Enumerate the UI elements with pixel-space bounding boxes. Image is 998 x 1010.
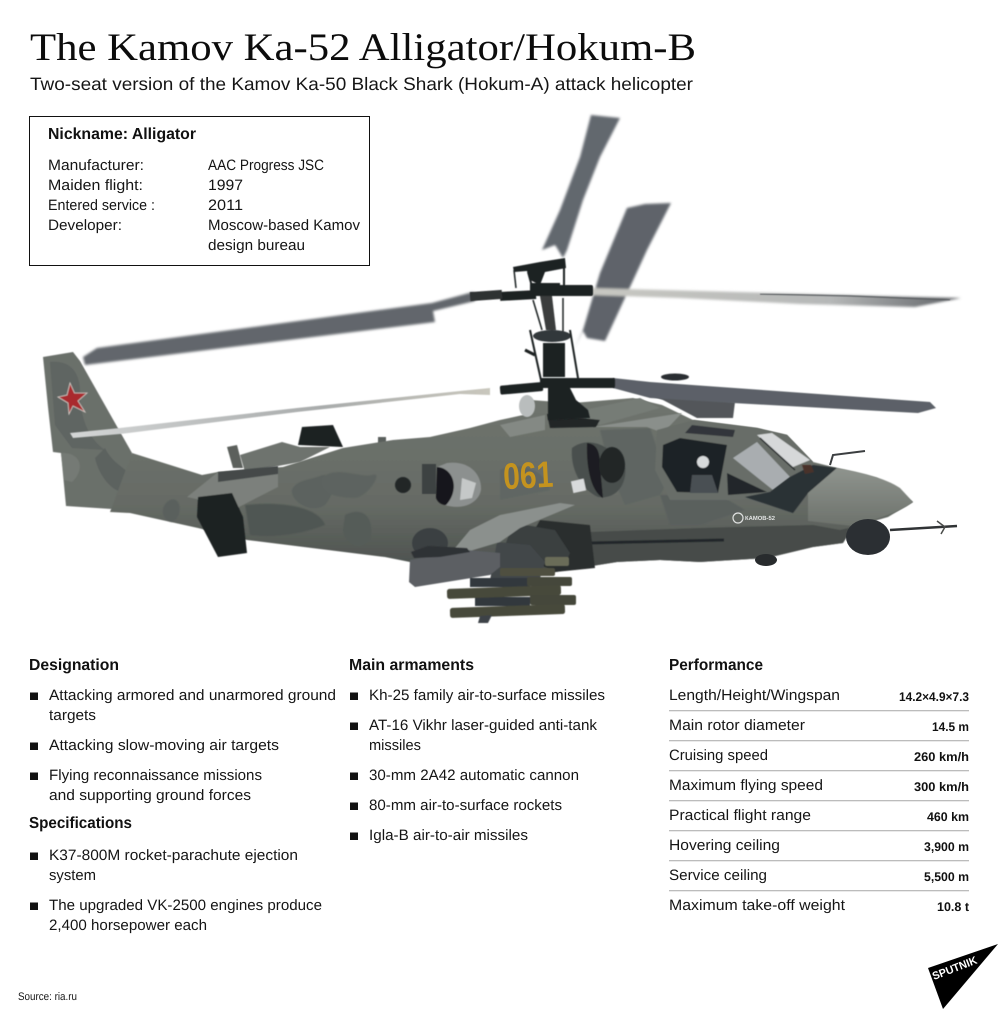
entered service row: 2011 xyxy=(208,197,243,214)
panel: performance table: Length/Height/Wingspan xyxy=(669,687,840,704)
heading: designation: Designation xyxy=(29,657,119,674)
panel: main armaments: 30-mm 2A42 automatic cannon xyxy=(369,767,579,784)
entered service row xyxy=(48,197,243,214)
panel: specifications: The upgraded VK-2500 engines produce xyxy=(49,897,322,914)
lower dark panel xyxy=(520,520,595,572)
rotor hub and mast xyxy=(470,258,615,420)
panel: performance table xyxy=(669,657,970,914)
nose xyxy=(745,465,913,526)
armament pylon and missiles xyxy=(409,503,576,623)
panel: specifications xyxy=(29,815,322,934)
pilot xyxy=(690,456,718,493)
belly shadow xyxy=(540,525,853,575)
serial number 061: 061 xyxy=(502,454,554,497)
panel: performance table: 10.8 t xyxy=(937,900,970,914)
panel: performance table: Maximum flying speed xyxy=(669,777,823,794)
panel: performance table: 3,900 m xyxy=(924,840,969,854)
tail fin xyxy=(43,352,140,510)
developer row: Moscow-based Kamov xyxy=(208,217,360,234)
rotor blades behind the body xyxy=(83,115,961,365)
Kamov logo: КАМОВ-52 xyxy=(745,515,776,522)
nose pitot xyxy=(830,451,865,465)
panel: specifications: 2,400 horsepower each xyxy=(49,917,207,934)
cockpit canopy xyxy=(655,420,813,500)
panel: performance table: Main rotor diameter xyxy=(669,717,805,734)
panel: designation: and supporting ground forces xyxy=(49,787,251,804)
panel: performance table: Practical flight range xyxy=(669,807,811,824)
heading: main armaments: Main armaments xyxy=(349,657,474,674)
title: The Kamov Ka-52 Alligator/Hokum-B xyxy=(30,26,696,69)
panel: main armaments: 80-mm air-to-surface rockets xyxy=(369,797,562,814)
heading: performance: Performance xyxy=(669,657,763,674)
panel: performance table: 14.2×4.9×7.3 xyxy=(899,690,969,704)
maiden flight row: Maiden flight: xyxy=(48,177,143,194)
subtitle: Two-seat version of the Kamov Ka-50 Black Shark (Hokum-A) attack helicopter xyxy=(30,74,693,94)
blade dark edge xyxy=(760,294,950,300)
panel: designation: Attacking slow-moving air targets xyxy=(49,737,279,754)
panel: performance table: 460 km xyxy=(927,810,969,824)
maiden flight row: 1997 xyxy=(208,177,243,194)
panel: specifications: system xyxy=(49,867,96,884)
panel: main armaments xyxy=(349,657,605,844)
heading: specifications: Specifications xyxy=(29,815,132,832)
nickname: Nickname: Alligator xyxy=(48,126,196,143)
panel: performance table: 5,500 m xyxy=(924,870,969,884)
rear upper fuselage details xyxy=(227,425,386,472)
panel: performance table: Service ceiling xyxy=(669,867,767,884)
panel: specifications: K37-800M rocket-parachute ejection xyxy=(49,847,298,864)
red star xyxy=(58,383,87,414)
stabilizer xyxy=(187,466,278,557)
main fuselage xyxy=(110,398,913,575)
maiden flight row xyxy=(48,177,243,194)
panel: main armaments: AT-16 Vikhr laser-guided anti-tank xyxy=(369,717,597,734)
sensor turret and probe xyxy=(755,519,957,566)
panel: main armaments: missiles xyxy=(369,737,421,754)
top fairing panels xyxy=(500,374,735,437)
logo: Sputnik xyxy=(928,944,998,1009)
camouflage patches xyxy=(163,428,745,546)
panel: designation xyxy=(29,657,336,804)
manufacturer row xyxy=(48,157,324,174)
panel: designation: targets xyxy=(49,707,96,724)
developer row: design bureau xyxy=(208,237,305,254)
helicopter illustration xyxy=(43,115,961,623)
entered service row: Entered service : xyxy=(48,197,155,214)
info box xyxy=(30,116,370,266)
engine nacelles xyxy=(395,442,625,507)
developer row xyxy=(48,217,360,254)
panel: designation: Attacking armored and unarmored ground xyxy=(49,687,336,704)
panel: performance table: Hovering ceiling xyxy=(669,837,780,854)
logo: Sputnik: SPUTNIK xyxy=(931,955,979,983)
developer row: Developer: xyxy=(48,217,122,234)
panel: main armaments: Igla-B air-to-air missiles xyxy=(369,827,528,844)
panel: performance table: 14.5 m xyxy=(932,720,969,734)
manufacturer row: Manufacturer: xyxy=(48,157,144,174)
panel: designation: Flying reconnaissance missions xyxy=(49,767,262,784)
panel: performance table: 300 km/h xyxy=(914,780,969,794)
panel: main armaments: Kh-25 family air-to-surface missiles xyxy=(369,687,605,704)
lower right rotor blade xyxy=(613,378,936,413)
lower rotor blade left xyxy=(70,388,490,438)
panel: performance table: Cruising speed xyxy=(669,747,768,764)
source note: Source: ria.ru xyxy=(18,991,77,1003)
Kamov logo xyxy=(733,513,776,523)
manufacturer row: AAC Progress JSC xyxy=(208,157,324,174)
panel: performance table: 260 km/h xyxy=(914,750,969,764)
panel: performance table: Maximum take-off weight xyxy=(669,897,846,914)
